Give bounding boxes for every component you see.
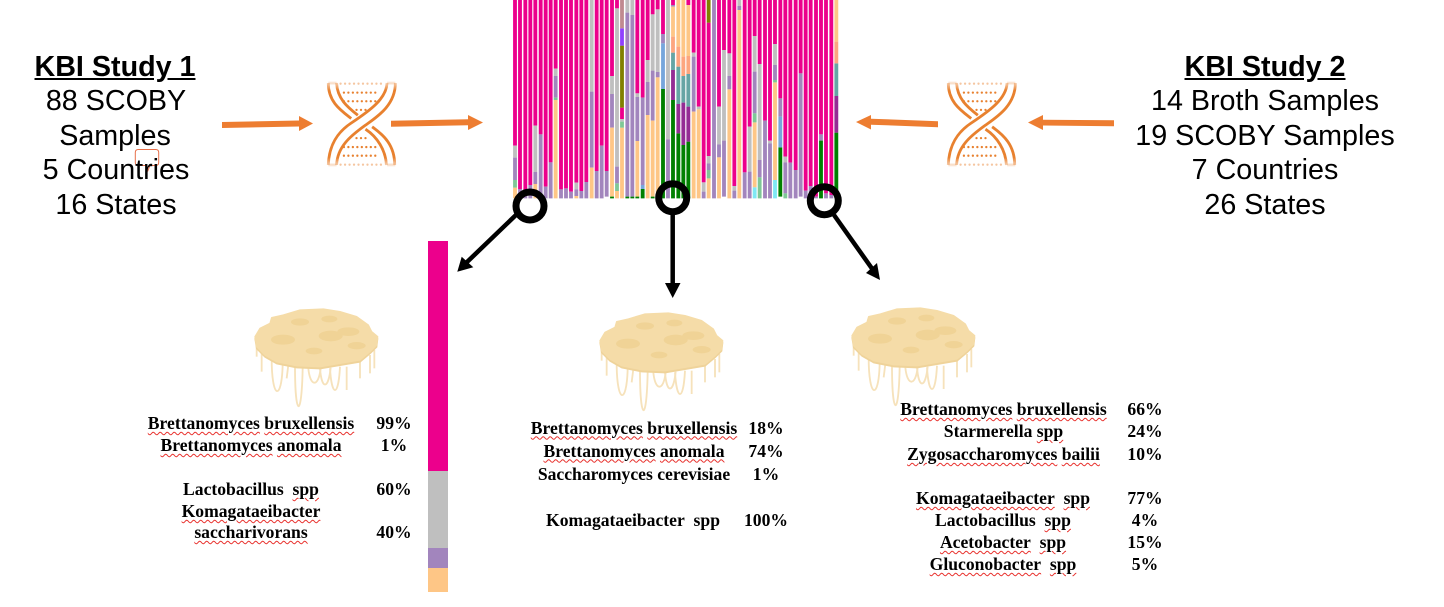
table: left sample composition: 60% — [376, 479, 412, 499]
callout circle and arrow: right sample — [810, 187, 880, 280]
table: right sample composition: Acetobacter spp — [940, 532, 1066, 552]
table: middle sample composition: Brettanomyces bruxellensis — [531, 418, 737, 438]
text block: KBI Study 2 — [1135, 51, 1395, 221]
table: right sample composition: 77% — [1127, 488, 1163, 508]
table: left sample composition: Lactobacillus spp — [183, 479, 319, 499]
table: left sample composition: 40% — [376, 522, 412, 542]
text block: KBI Study 2: 26 States — [1204, 189, 1326, 221]
table: left sample composition: Komagataeibacter — [182, 501, 320, 521]
table: middle sample composition: Brettanomyces anomala — [544, 441, 724, 461]
arrow: study 2 to DNA — [1028, 115, 1114, 130]
text block: KBI Study 2: 19 SCOBY Samples — [1135, 120, 1395, 152]
stacked bar chart: community composition — [515, 0, 836, 198]
text block: KBI Study 1: 5 Countries — [43, 154, 189, 186]
arrow: DNA to chart — [391, 115, 483, 130]
icon: DNA study 1 — [328, 83, 395, 165]
table: right sample composition: 4% — [1132, 510, 1158, 530]
table: left sample composition — [148, 413, 412, 544]
icon: SCOBY left — [255, 309, 378, 406]
table: right sample composition — [900, 399, 1163, 576]
table: right sample composition: Komagataeibacter spp — [916, 488, 1090, 508]
table: left sample composition: Brettanomyces bruxellensis — [148, 413, 354, 433]
table: middle sample composition — [530, 418, 788, 530]
table: right sample composition: Gluconobacter spp — [930, 554, 1076, 574]
table: middle sample composition: 74% — [748, 441, 784, 461]
table: middle sample composition: 100% — [744, 510, 788, 530]
table: right sample composition: Zygosaccharomyces bailii — [907, 444, 1100, 464]
text block: KBI Study 1: 88 SCOBY — [46, 85, 186, 117]
text block: KBI Study 2: 7 Countries — [1192, 154, 1338, 186]
text block: KBI Study 2: 14 Broth Samples — [1151, 85, 1379, 117]
text block: KBI Study 1: Samples — [59, 120, 171, 152]
table: left sample composition: 1% — [381, 435, 407, 455]
table: right sample composition: 5% — [1132, 554, 1158, 574]
table: right sample composition: 66% — [1127, 399, 1163, 419]
table: right sample composition: Brettanomyces bruxellensis — [900, 399, 1107, 419]
table: right sample composition: 10% — [1127, 444, 1163, 464]
table: right sample composition: Lactobacillus spp — [935, 510, 1071, 530]
table: left sample composition: saccharivorans — [194, 522, 308, 542]
icon: SCOBY middle — [600, 313, 723, 410]
arrow: study 1 to DNA — [222, 116, 313, 131]
table: right sample composition: 24% — [1127, 421, 1163, 441]
callout circle and arrow: middle sample — [659, 184, 687, 298]
text block: KBI Study 1: 16 States — [55, 189, 177, 221]
table: right sample composition: 15% — [1127, 532, 1163, 552]
table: middle sample composition: 18% — [748, 418, 784, 438]
arrow: DNA study 2 to chart — [856, 115, 938, 130]
single sample stacked bar — [428, 241, 448, 592]
table: right sample composition: Starmerella spp — [944, 421, 1063, 441]
table: middle sample composition: 1% — [753, 464, 779, 484]
table: middle sample composition: Komagataeibacter spp — [546, 510, 720, 530]
text block: KBI Study 2: KBI Study 2 — [1184, 51, 1346, 83]
table: left sample composition: 99% — [376, 413, 412, 433]
table: middle sample composition: Saccharomyces cerevisiae — [538, 464, 730, 484]
icon: DNA study 2 — [948, 83, 1015, 165]
callout circle and arrow: left sample — [457, 192, 544, 272]
text block: KBI Study 1 — [34, 51, 196, 221]
text block: KBI Study 1: KBI Study 1 — [34, 51, 196, 83]
icon: SCOBY right — [852, 308, 975, 405]
comment marker icon — [135, 150, 159, 170]
table: left sample composition: Brettanomyces anomala — [160, 435, 342, 455]
